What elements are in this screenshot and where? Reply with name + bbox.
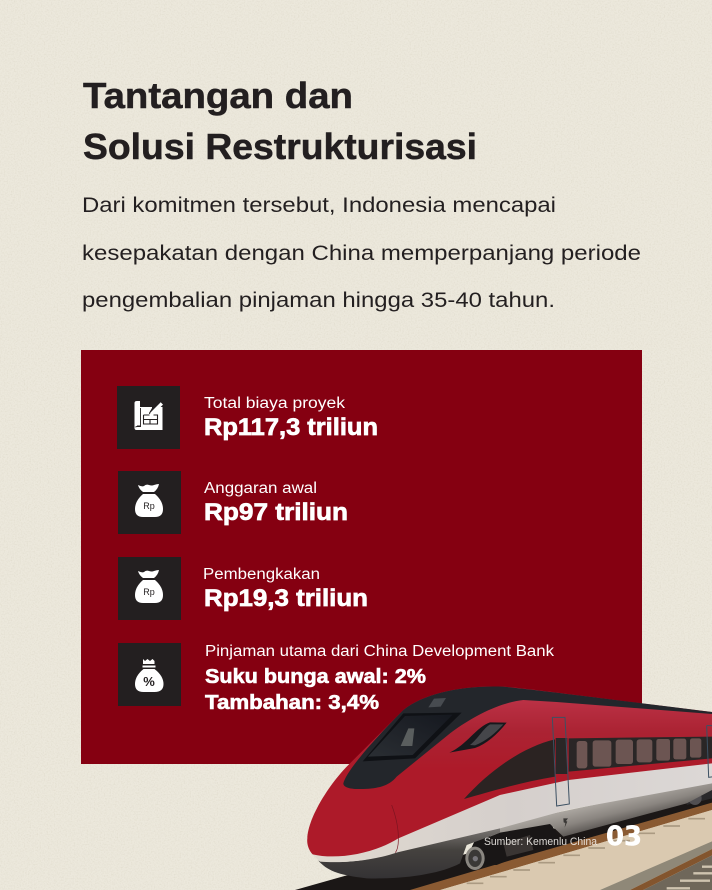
icon: money bag initial budget: Rp bbox=[143, 501, 155, 511]
icon: money bag overrun bbox=[118, 557, 181, 620]
icon: money bag initial budget bbox=[118, 471, 181, 534]
nose underside bbox=[318, 827, 500, 878]
text: China Development Bank loan bbox=[205, 643, 554, 714]
text: cost overrun: Pembengkakan bbox=[203, 566, 320, 583]
text: initial budget bbox=[204, 480, 348, 526]
icon: money bag interest bbox=[118, 643, 181, 706]
text: initial budget: Rp97 triliun bbox=[204, 499, 348, 526]
text: cost overrun: Rp19,3 triliun bbox=[204, 585, 368, 612]
source note: Sumber: Kemenlu China bbox=[484, 836, 598, 848]
railway tracks bbox=[295, 783, 712, 890]
icon: money bag overrun: Rp bbox=[143, 587, 155, 597]
title: Solusi Restrukturisasi bbox=[83, 126, 477, 167]
intro text block bbox=[82, 193, 641, 312]
white band bbox=[313, 763, 712, 862]
side cab window bbox=[449, 722, 507, 753]
text: China Development Bank loan: Tambahan: 3,4% bbox=[205, 692, 379, 714]
passenger window band bbox=[556, 737, 712, 774]
black roof and cab mask bbox=[343, 686, 712, 789]
intro text block: Dari komitmen tersebut, Indonesia mencapai bbox=[82, 193, 556, 217]
intro text block: pengembalian pinjaman hingga 35-40 tahun. bbox=[82, 288, 555, 312]
intro text block: kesepakatan dengan China memperpanjang periode bbox=[82, 241, 641, 265]
page number: 03 bbox=[606, 821, 642, 852]
text: total project cost: Rp117,3 triliun bbox=[204, 414, 378, 441]
red body bbox=[307, 686, 712, 856]
lower skirt bbox=[490, 780, 712, 837]
bogies and wheels bbox=[463, 785, 712, 870]
train on railway tracks bbox=[295, 686, 712, 890]
logo mark on skirt bbox=[563, 818, 568, 828]
text: cost overrun bbox=[203, 566, 368, 612]
panel: project cost figures bbox=[81, 350, 642, 764]
text: China Development Bank loan: Suku bunga awal: 2% bbox=[205, 666, 426, 688]
icon: money bag interest: % bbox=[143, 674, 155, 689]
black side sweep bbox=[464, 739, 555, 799]
icon: blueprint bbox=[117, 386, 180, 449]
text: China Development Bank loan: Pinjaman utama dari China Development Bank bbox=[205, 643, 554, 660]
doors bbox=[552, 717, 712, 806]
text: total project cost: Total biaya proyek bbox=[204, 395, 345, 412]
text: initial budget: Anggaran awal bbox=[204, 480, 317, 497]
windshield bbox=[363, 698, 462, 761]
title: Tantangan dan bbox=[83, 75, 353, 116]
text: total project cost bbox=[204, 395, 378, 441]
title bbox=[83, 75, 477, 167]
nose seam bbox=[392, 805, 398, 853]
